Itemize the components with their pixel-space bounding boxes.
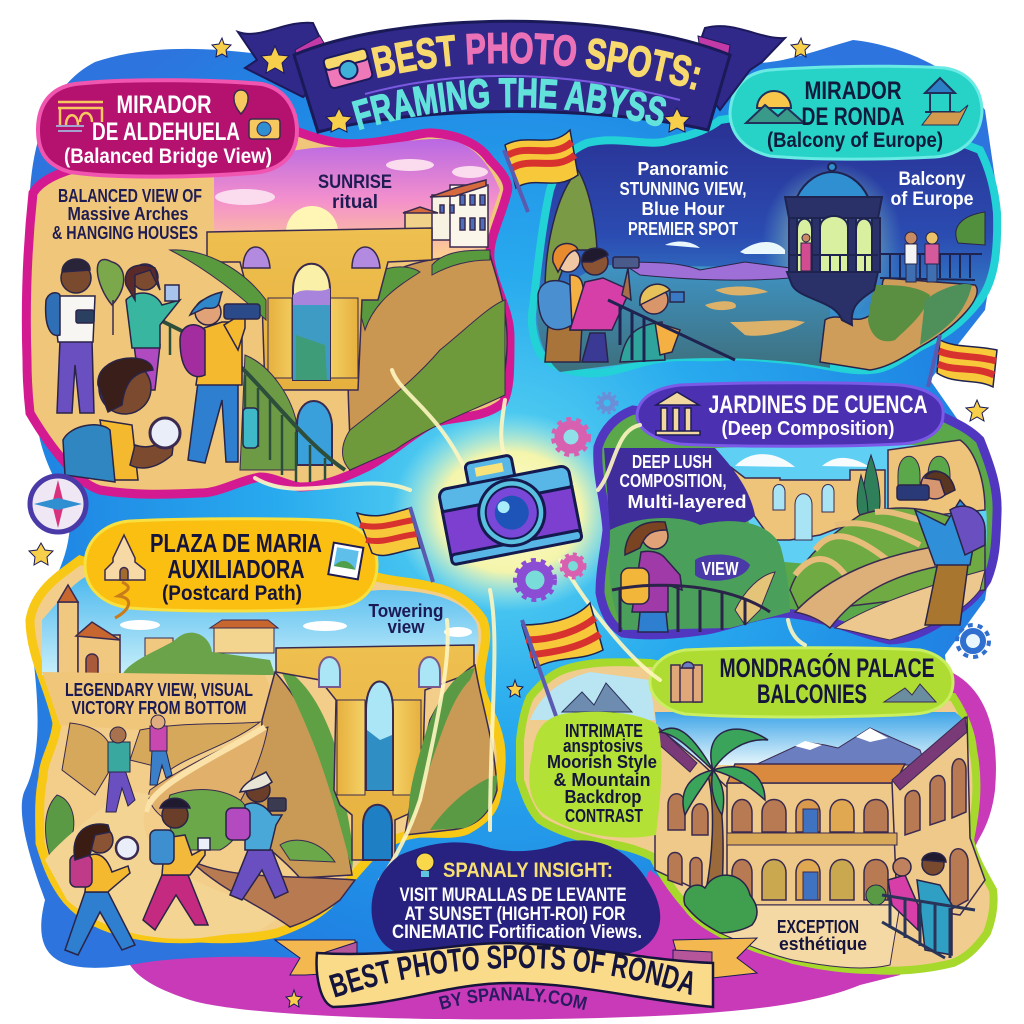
header: Mirador de Ronda: (Balcony of Europe) bbox=[767, 129, 943, 152]
icon: mountains bbox=[884, 684, 936, 702]
icon: title camera bbox=[323, 48, 373, 89]
scene: left cliff bbox=[545, 170, 597, 290]
scene: curved bridge bbox=[795, 545, 945, 628]
text: intimate moorish style: & Mountain bbox=[554, 770, 650, 790]
flag center bottom bbox=[522, 603, 603, 716]
scene: slope behind path bbox=[149, 727, 268, 830]
text: legendary view: LEGENDARY VIEW, VISUAL bbox=[65, 680, 253, 700]
text: balanced view: Massive Arches bbox=[68, 204, 188, 224]
scene: left green overhang bbox=[170, 250, 266, 320]
scene: church bbox=[58, 585, 120, 674]
scene: upper arches bbox=[668, 759, 966, 835]
scene: piers bbox=[268, 298, 358, 378]
man with binoculars bbox=[570, 248, 639, 362]
scene: terraces bbox=[790, 508, 985, 612]
text: exception esthetique: EXCEPTION bbox=[777, 917, 859, 937]
header: Mirador de Aldehuela bbox=[38, 80, 297, 177]
person: photographer hat bbox=[180, 292, 260, 463]
scene: lower left trees bbox=[45, 795, 74, 870]
railing left bbox=[608, 300, 735, 362]
header: Plaza de Maria Auxiliadora: (Postcard Path) bbox=[162, 582, 302, 605]
text: panoramic bbox=[620, 159, 746, 239]
header: Plaza de Maria Auxiliadora bbox=[85, 519, 377, 618]
dome bbox=[797, 172, 868, 197]
scene: hill town houses bbox=[145, 620, 278, 658]
title banner bbox=[236, 20, 788, 134]
panel: Mirador de Aldehuela bbox=[26, 130, 510, 494]
text: legendary view bbox=[65, 680, 253, 718]
scene: balcony rail bbox=[727, 833, 897, 845]
scene: iron railing right bbox=[880, 254, 982, 280]
icon: camera bbox=[249, 119, 280, 139]
people left group bbox=[538, 244, 684, 362]
text: towering view: Towering bbox=[368, 601, 444, 621]
title line 2: FRAMING THE ABYSS bbox=[352, 78, 666, 130]
icon: gear pink top bbox=[553, 419, 589, 455]
panel 5 frame bbox=[520, 662, 994, 971]
insight box: SPANALY INSIGHT: bbox=[443, 859, 613, 882]
text: balanced view: BALANCED VIEW OF bbox=[58, 186, 202, 206]
text: deep lush: DEEP LUSH bbox=[632, 452, 712, 472]
icon: church bbox=[105, 535, 145, 580]
scene: shrubs bbox=[684, 875, 757, 933]
person: girl bbox=[621, 522, 682, 632]
text: intimate moorish style: Backdrop bbox=[564, 787, 642, 807]
scene: piers bbox=[337, 700, 421, 795]
scene: lower arches bbox=[668, 849, 968, 910]
text: balanced view bbox=[52, 186, 202, 243]
scene: blue door upper bbox=[803, 809, 818, 833]
panel: Jardines de Cuenca bbox=[598, 410, 997, 640]
flag right bbox=[928, 335, 997, 387]
people on right balcony bbox=[888, 853, 952, 955]
divider line bbox=[365, 76, 680, 100]
text: exception esthetique: esthétique bbox=[779, 934, 867, 954]
scene: palm tree bbox=[660, 728, 768, 890]
icon: winding road bbox=[115, 582, 129, 618]
scene: lower green slope bbox=[342, 300, 505, 470]
scene: railing bbox=[160, 320, 345, 470]
text: towering view bbox=[368, 601, 444, 637]
icon: bridge bbox=[56, 102, 103, 131]
panel 4 frame bbox=[30, 560, 501, 939]
person in gazebo bbox=[801, 234, 811, 271]
tree right bbox=[956, 212, 985, 245]
scene: land bbox=[537, 265, 830, 372]
scene: big left cliff bbox=[232, 672, 352, 878]
scene: left greenery bbox=[609, 518, 790, 630]
railing bbox=[612, 585, 770, 632]
scene: bridge lower path bbox=[835, 570, 985, 640]
scene: right cliff bbox=[405, 665, 497, 835]
scene: sky bbox=[214, 139, 500, 262]
icon: gear purple bbox=[515, 560, 555, 600]
person: woman front bbox=[65, 824, 138, 955]
scene: sun bbox=[286, 206, 338, 258]
scene: tree bbox=[97, 260, 124, 335]
scene: side arches bbox=[319, 657, 440, 687]
header: Mirador de Ronda: MIRADOR bbox=[804, 77, 902, 105]
scene: cypress trees bbox=[857, 455, 880, 515]
scene: clouds bbox=[735, 454, 870, 467]
text: deep lush: COMPOSITION, bbox=[620, 471, 726, 491]
text: balcony of europe: Balcony bbox=[898, 169, 966, 190]
header: Jardines de Cuenca: (Deep Composition) bbox=[722, 418, 894, 440]
person: child with compass bbox=[63, 358, 180, 482]
scene: winding path edge bbox=[146, 727, 265, 812]
scene: low stone wall bbox=[190, 860, 355, 927]
insight box: AT SUNSET (HIGHT-ROI) FOR bbox=[404, 904, 626, 925]
water bottle bbox=[243, 408, 258, 448]
scene: left path bbox=[735, 572, 775, 625]
columns bbox=[789, 218, 880, 272]
scene: right cliffs bbox=[348, 255, 507, 470]
scene: small mountains bbox=[562, 683, 632, 712]
panel: Mondragon Palace Balconies bbox=[520, 662, 994, 971]
panel 3 frame bbox=[598, 410, 997, 640]
icon: sun and mountains bbox=[746, 91, 804, 123]
icon: gazebo bbox=[922, 78, 968, 125]
text: sunrise ritual: ritual bbox=[332, 192, 378, 213]
scene: right cliff with green bbox=[820, 278, 977, 370]
header: Mirador de Aldehuela: (Balanced Bridge View) bbox=[64, 145, 272, 168]
icon: flags bbox=[357, 130, 997, 716]
tourists right bbox=[905, 232, 939, 282]
text: intimate moorish style bbox=[547, 721, 657, 826]
person: right hiker bbox=[226, 772, 288, 900]
header: Plaza de Maria Auxiliadora: PLAZA DE MARIA bbox=[150, 528, 322, 558]
scene: central arch bbox=[366, 682, 393, 790]
scene: lower arch bbox=[297, 401, 332, 465]
header: Mirador de Aldehuela: MIRADOR bbox=[116, 91, 212, 119]
lattice bbox=[785, 197, 882, 218]
header: Jardines de Cuenca: JARDINES DE CUENCA bbox=[708, 391, 928, 419]
header: Mirador de Ronda bbox=[730, 66, 982, 159]
header: Mirador de Ronda: DE RONDA bbox=[802, 103, 904, 131]
ribbon tails bbox=[238, 23, 335, 97]
header: Plaza de Maria Auxiliadora: AUXILIADORA bbox=[168, 554, 305, 584]
scene: sky bbox=[715, 445, 987, 570]
text: panoramic: STUNNING VIEW, bbox=[620, 179, 746, 199]
scene: dark text cloud bbox=[604, 448, 755, 530]
scene: clouds bbox=[120, 620, 472, 637]
scene: central arch bbox=[293, 264, 330, 380]
ribbon tails bbox=[275, 938, 757, 978]
panel: Mirador de Ronda bbox=[532, 100, 997, 373]
panel 1 frame and sand base bbox=[26, 130, 510, 494]
scene: clouds bbox=[215, 159, 488, 205]
person: middle hiker bbox=[143, 798, 210, 930]
insight box: VISIT MURALLAS DE LEVANTE bbox=[400, 885, 626, 906]
scene: mountains bbox=[755, 728, 925, 765]
text: balcony of europe bbox=[890, 169, 974, 210]
scene: aqueduct arches bbox=[773, 484, 834, 540]
scrollwork base bbox=[787, 272, 878, 325]
flag center left bbox=[357, 507, 433, 582]
scene: palace left wing bbox=[655, 725, 730, 905]
text: deep lush: Multi-layered bbox=[628, 492, 746, 512]
scene: far rocks bbox=[62, 722, 260, 795]
panel 2 frame and sky bbox=[532, 100, 997, 373]
icon: light bulb bbox=[416, 853, 434, 877]
scene: cliff top greenery bbox=[355, 250, 490, 330]
title line 1: BEST PHOTO SPOTS: bbox=[371, 32, 701, 90]
scene: gazebo glow bbox=[762, 162, 902, 318]
header: Mirador de Aldehuela: DE ALDEHUELA bbox=[92, 118, 240, 146]
scene: side arches bbox=[243, 247, 380, 268]
scene: lime text area bbox=[529, 712, 662, 838]
icon: map pin bbox=[234, 90, 248, 114]
text: balanced view: & HANGING HOUSES bbox=[52, 223, 198, 243]
hat tourist bbox=[620, 284, 684, 362]
text: panoramic: Panoramic bbox=[638, 159, 728, 179]
text: deep lush bbox=[620, 452, 746, 512]
scene: green bushes bbox=[167, 790, 335, 862]
scene: sand ground bbox=[42, 672, 300, 735]
header: Mondragon bbox=[650, 648, 953, 717]
scene: palace roof bbox=[727, 764, 905, 783]
scene: hanging houses bbox=[403, 180, 488, 247]
scene: lower arch bbox=[363, 805, 392, 860]
icon: gear pink small bbox=[561, 554, 585, 578]
text: exception esthetique bbox=[777, 917, 867, 954]
scene: palace centre bbox=[727, 783, 897, 905]
text: panoramic: PREMIER SPOT bbox=[628, 219, 738, 239]
icon: palace bbox=[671, 662, 702, 702]
insight box bbox=[371, 840, 660, 960]
balcony rail bbox=[790, 255, 878, 272]
icon: central camera bbox=[434, 444, 582, 565]
scene: blue door lower bbox=[803, 872, 818, 900]
stars on banner bbox=[261, 46, 690, 132]
text: legendary view: VICTORY FROM BOTTOM bbox=[72, 698, 246, 718]
scene: bridge bbox=[276, 645, 474, 860]
text: sunrise ritual: SUNRISE bbox=[318, 172, 392, 193]
text: panoramic: Blue Hour bbox=[642, 199, 724, 219]
scene: tan patches bbox=[705, 286, 805, 336]
person: left man with white shirt bbox=[46, 259, 95, 413]
scene: palace right wing bbox=[892, 717, 985, 915]
person: woman in teal bbox=[125, 264, 180, 390]
scene: gazebo balcony bbox=[785, 163, 882, 325]
scene: bridge bbox=[207, 228, 432, 390]
text: balcony of europe: of Europe bbox=[890, 189, 974, 210]
orange-haired tourist bbox=[538, 244, 584, 362]
header: Mondragon: MONDRAGÓN PALACE bbox=[720, 652, 934, 683]
text: sunrise ritual bbox=[318, 172, 392, 213]
scene: mountains bbox=[620, 262, 790, 280]
people: far hikers bbox=[106, 715, 172, 812]
scene: sky behind mountains top left bbox=[530, 672, 655, 720]
header: Mondragon: BALCONIES bbox=[757, 679, 867, 709]
railing right bbox=[882, 895, 975, 958]
ribbon body bbox=[294, 21, 730, 132]
text: intimate moorish style: ansptosivs bbox=[563, 736, 643, 756]
light streams bbox=[255, 370, 805, 880]
scene: view cloud bbox=[695, 555, 750, 581]
icon: gear blue small bbox=[597, 393, 617, 413]
openings bbox=[797, 216, 872, 272]
person: photographer right bbox=[897, 471, 985, 625]
scene: white clouds bbox=[665, 242, 785, 254]
scene: right tall aqueduct bbox=[888, 440, 985, 520]
icon: photo bbox=[328, 543, 363, 579]
scene: cliff green strip bbox=[278, 665, 353, 870]
text: towering view: view bbox=[388, 617, 425, 637]
insight box: CINEMATIC Fortification Views. bbox=[392, 922, 642, 943]
scene: sky bbox=[42, 575, 478, 675]
text: intimate moorish style: Moorish Style bbox=[547, 752, 657, 772]
icon: compass bbox=[30, 476, 86, 532]
scene: gorge greenery below railing bbox=[240, 355, 296, 470]
text: view: VIEW bbox=[702, 559, 738, 579]
text: intimate moorish style: CONTRAST bbox=[565, 806, 643, 826]
scene: courtyard floor bbox=[700, 905, 900, 968]
scene: hill bushes bbox=[122, 633, 275, 675]
bottom ribbon bbox=[274, 938, 758, 1010]
scene: sky bbox=[655, 712, 968, 765]
ribbon body bbox=[317, 943, 713, 1007]
scene: potted shrub bbox=[866, 885, 886, 905]
scene: path ground bbox=[45, 790, 300, 939]
ribbon text: BEST PHOTO SPOTS OF RONDA bbox=[328, 945, 692, 998]
scene: aqueduct bbox=[732, 468, 885, 540]
text: intimate moorish style: INTRIMATE bbox=[565, 721, 643, 741]
icon: temple bbox=[656, 392, 700, 435]
scene: right cliff greenery bbox=[409, 668, 497, 830]
flag top bbox=[504, 130, 578, 212]
icon: gear right bbox=[957, 625, 989, 657]
credit: BY SPANALY.COM bbox=[438, 987, 588, 1010]
panel: Plaza de Maria Auxiliadora bbox=[30, 560, 501, 955]
header: Jardines de Cuenca bbox=[637, 383, 943, 446]
